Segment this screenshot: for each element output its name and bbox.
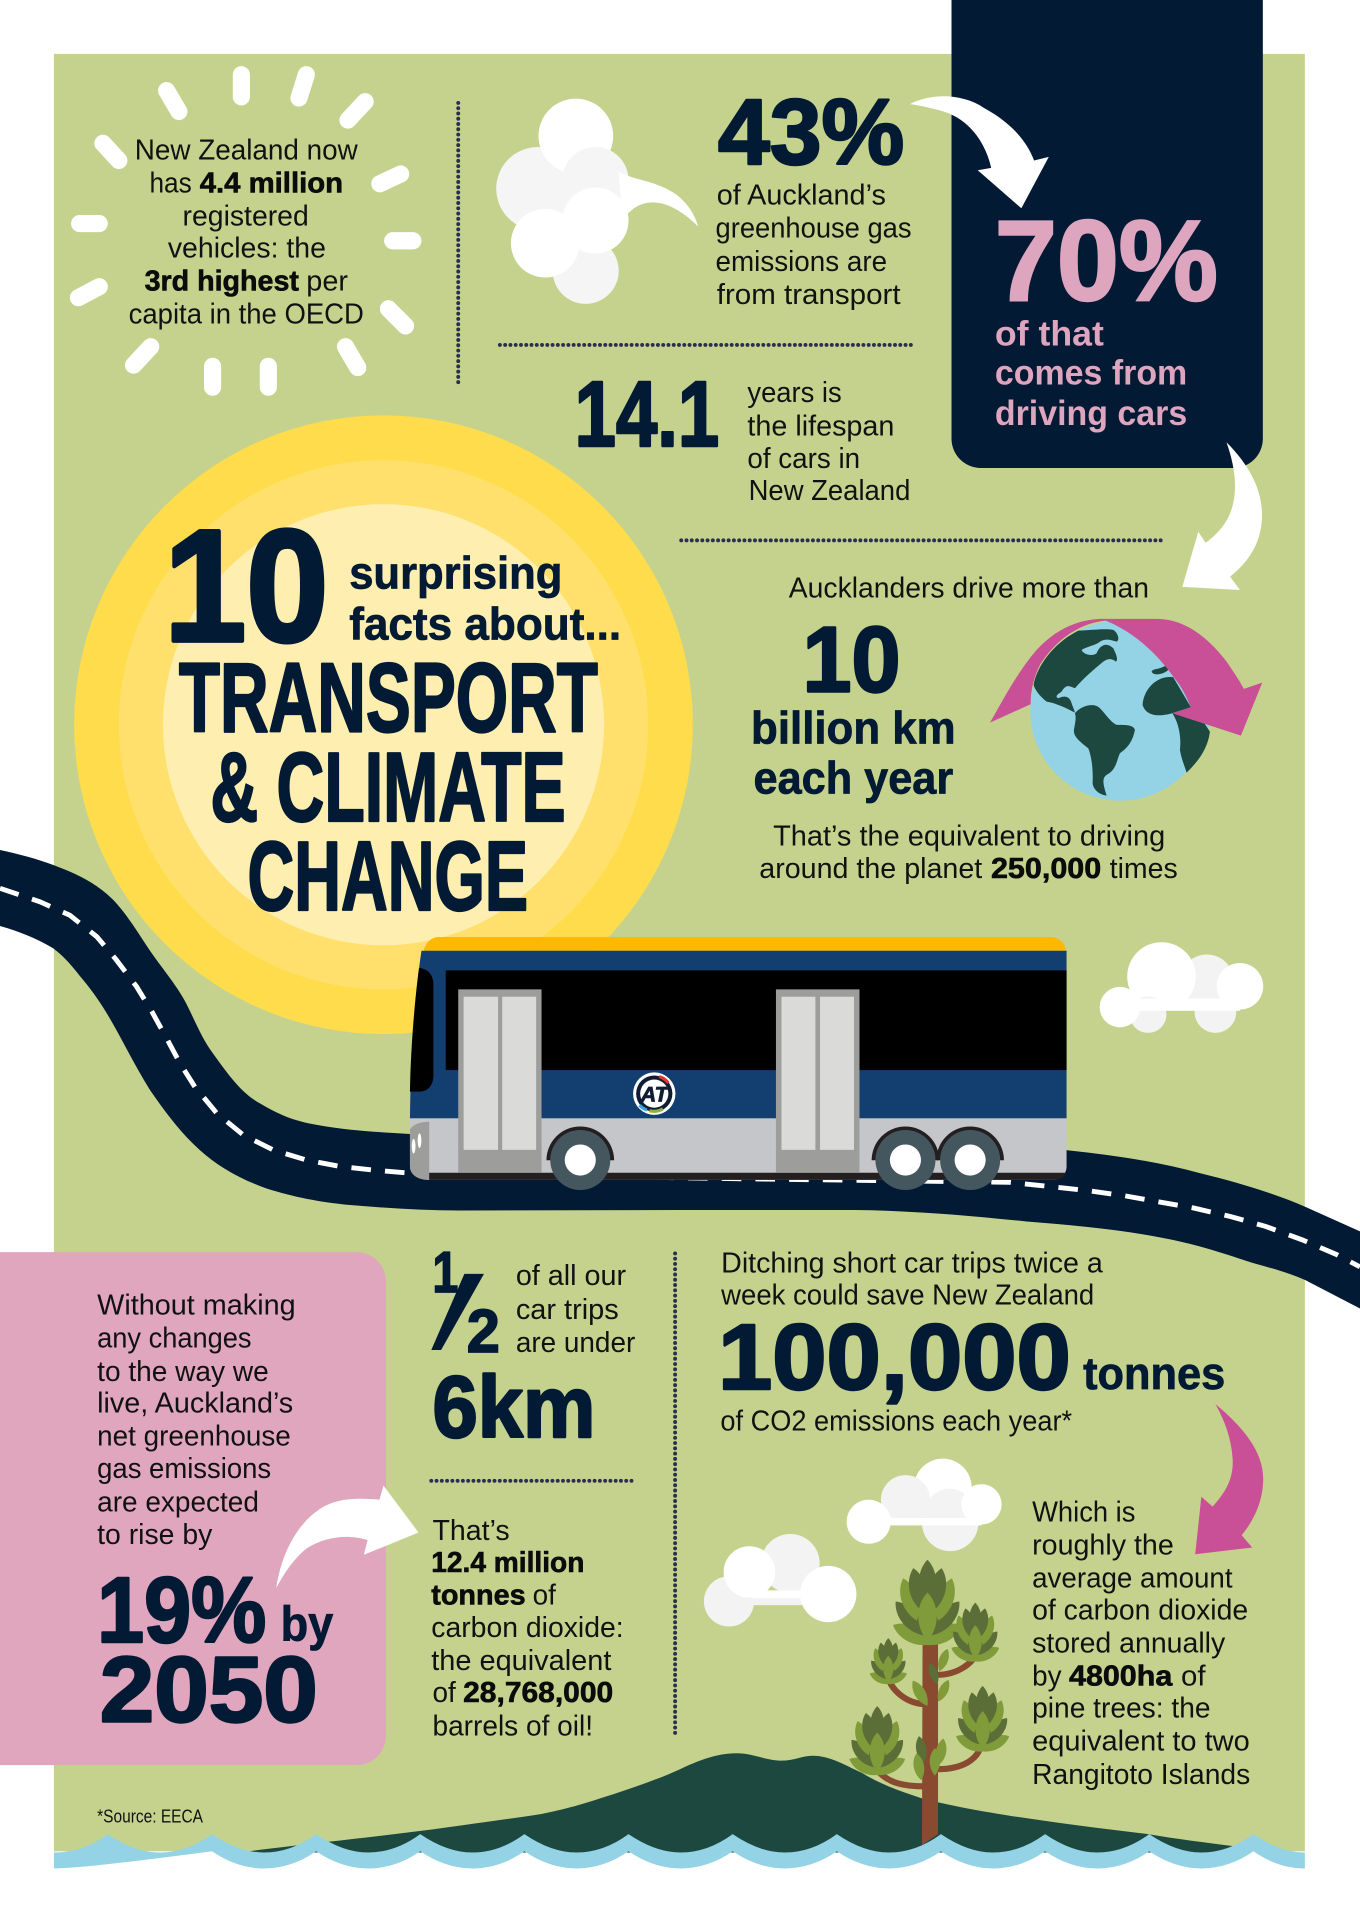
stat: 70%: 70%: [995, 198, 1218, 325]
text: pine trees comparison: Which is: [1032, 1496, 1135, 1528]
fact: half of car trips under 6km: 1: [433, 1241, 458, 1305]
hill: [239, 1753, 1250, 1853]
panel: navy 70% cars box: [952, 0, 1263, 468]
bus wheels: [546, 1126, 1004, 1190]
text: vehicle statistic: 3rd highest: [145, 265, 299, 297]
text: pine trees comparison: 4800ha: [1069, 1661, 1173, 1693]
fact: 14.1 years car lifespan: years is: [747, 377, 842, 409]
AT logo: AT: [640, 1083, 670, 1106]
fact: 10 billion km: [751, 572, 1178, 885]
fact: 14.1 years car lifespan: [575, 362, 910, 507]
text: pine trees comparison: equivalent to two: [1032, 1725, 1250, 1757]
text: vehicle statistic: capita in the OECD: [129, 298, 364, 330]
fact: 43% transport emissions: 43%: [718, 80, 904, 184]
text: 12.4 million tonnes: of: [433, 1677, 457, 1709]
sun circles: [74, 415, 693, 1034]
fact: 100,000 tonnes: 100,000: [718, 1305, 1071, 1409]
text: 12.4 million tonnes: barrels of oil!: [433, 1711, 593, 1743]
divider: dots under 6km: [431, 1479, 634, 1482]
icon: pine tree: [846, 1560, 1012, 1845]
fact: 14.1 years car lifespan: of cars in: [747, 443, 860, 475]
fact: 43% transport emissions: greenhouse gas: [716, 213, 912, 245]
fact: half of car trips under 6km: car trips: [516, 1294, 619, 1326]
bus skirt: [429, 1173, 1066, 1180]
text: vehicle statistic: New Zealand now: [135, 134, 358, 166]
text: without making changes: to the way we: [97, 1356, 269, 1388]
fact: 10 billion km: times: [1110, 853, 1178, 885]
bus rear door: [776, 989, 859, 1173]
fact: half of car trips under 6km: 2: [467, 1297, 500, 1365]
title: & CLIMATE: [210, 732, 566, 842]
fact: 100,000 tonnes: tonnes: [1083, 1348, 1225, 1399]
text: vehicle statistic: vehicles: the: [168, 232, 326, 264]
fact: half of car trips under 6km: 6km: [433, 1359, 595, 1456]
stat: 19% by 2050: 2050: [100, 1637, 318, 1741]
fact: 10 billion km: around the planet: [759, 853, 982, 885]
text: 12.4 million tonnes: of: [533, 1579, 557, 1611]
text: of that comes from driving cars: of that: [995, 314, 1104, 354]
fact: 10 billion km: 10: [803, 608, 901, 712]
text: 12.4 million tonnes: tonnes: [431, 1579, 526, 1611]
fact: 10 billion km: each year: [754, 752, 953, 803]
bus front bumper: [410, 1122, 429, 1180]
title: surprising: [349, 548, 562, 599]
icon: upper cloud: [847, 1459, 1002, 1551]
fact: 10 billion km: Aucklanders drive more than: [789, 572, 1149, 604]
fact: 10 billion km: 250,000: [991, 853, 1101, 885]
text: without making changes: Without making: [97, 1290, 296, 1322]
panel: sunburst facts about registered vehicles: [78, 75, 413, 387]
text: 12.4 million tonnes: 12.4 million: [431, 1547, 584, 1579]
text: of that comes from driving cars: driving cars: [995, 393, 1187, 433]
fact: half of car trips under 6km: are under: [516, 1327, 636, 1359]
fact: half of car trips under 6km: [431, 1241, 636, 1456]
icon: exhaust cloud: [496, 99, 698, 304]
text: of that comes from driving cars: comes from: [995, 353, 1187, 393]
title: facts about...: [349, 599, 621, 650]
text: pine trees comparison: average amount: [1032, 1563, 1233, 1595]
divider: vertical dots top: [457, 103, 460, 385]
icon: white rays: [78, 75, 413, 387]
text: without making changes: live, Auckland’s: [97, 1388, 293, 1420]
text: 12.4 million tonnes: the equivalent: [431, 1645, 611, 1677]
fact: 10 billion km: billion km: [751, 703, 956, 754]
fact: half of car trips under 6km: of all our: [516, 1260, 627, 1292]
icon: bus: [410, 937, 1067, 1190]
text: pine trees comparison: by: [1032, 1661, 1062, 1693]
text: without making changes: net greenhouse: [97, 1421, 291, 1453]
text: pine trees comparison: roughly the: [1032, 1529, 1174, 1561]
title: TRANSPORT: [179, 642, 598, 752]
fact: 14.1 years car lifespan: the lifespan: [747, 411, 894, 443]
arrow: white from navy box down: [1182, 442, 1262, 590]
text: without making changes: to rise by: [97, 1519, 213, 1551]
divider: vertical dots lower: [673, 1253, 677, 1734]
text: without making changes: any changes: [97, 1323, 252, 1355]
icon: lower cloud: [704, 1534, 856, 1626]
bus roof: [424, 937, 1066, 951]
arrow: magenta down to tree text: [1195, 1404, 1263, 1554]
text: 12.4 million tonnes: [431, 1515, 624, 1743]
text: 12.4 million tonnes: 28,768,000: [463, 1677, 613, 1709]
stat: 19% by 2050: 19%: [97, 1558, 266, 1662]
divider: horizontal dots upper: [500, 343, 912, 346]
bus lower body: [410, 1118, 1067, 1180]
stat: 19% by 2050: [97, 1558, 333, 1741]
fact: 10 billion km: That’s the equivalent to driving: [773, 820, 1165, 852]
bus front door: [458, 989, 542, 1173]
icon: cloud beside bus: [1100, 942, 1263, 1033]
fact: 100,000 tonnes: week could save New Zealand: [720, 1279, 1094, 1311]
text: pine trees comparison: of carbon dioxide: [1032, 1595, 1248, 1627]
fact: 43% transport emissions: from transport: [717, 279, 901, 311]
fact: 43% transport emissions: [716, 80, 912, 311]
stat: 19% by 2050: by: [281, 1598, 333, 1652]
hero: sun with title: [74, 415, 693, 1034]
fact: 100,000 tonnes: [718, 1248, 1225, 1438]
bus windscreen: [410, 968, 433, 1092]
water waves: [54, 1834, 1305, 1868]
fact: 43% transport emissions: of Auckland’s: [717, 180, 886, 212]
fact: 100,000 tonnes: of CO2 emissions each year*: [720, 1406, 1072, 1438]
title: 10: [164, 497, 328, 675]
fact: 43% transport emissions: emissions are: [716, 246, 887, 278]
text: without making changes: are expected: [97, 1486, 259, 1518]
text: vehicle statistic: 4.4 million: [200, 167, 343, 199]
text: of that comes from driving cars: [995, 314, 1187, 433]
text: without making changes: gas emissions: [97, 1453, 271, 1485]
arrow: white from 43% to 70%: [910, 96, 1049, 208]
fact: 14.1 years car lifespan: 14.1: [575, 362, 719, 466]
bus body blue: [410, 951, 1067, 1118]
text: pine trees comparison: stored annually: [1032, 1627, 1226, 1659]
text: pine trees comparison: pine trees: the: [1032, 1693, 1211, 1725]
divider: horizontal dots lower: [681, 539, 1162, 542]
AT logo: [633, 1072, 675, 1115]
text: vehicle statistic: has: [149, 167, 192, 199]
panel: pink 19% by 2050: [0, 1252, 386, 1765]
title: [164, 497, 621, 931]
text: pine trees comparison: of: [1181, 1661, 1207, 1693]
text: 12.4 million tonnes: That’s: [433, 1515, 510, 1547]
text: 12.4 million tonnes: carbon dioxide:: [431, 1612, 624, 1644]
fact: 14.1 years car lifespan: New Zealand: [749, 475, 910, 507]
text: pine trees comparison: [1032, 1496, 1250, 1791]
text: vehicle statistic: [129, 134, 364, 330]
road: [0, 850, 1360, 1309]
title: CHANGE: [247, 821, 528, 931]
fact: 100,000 tonnes: Ditching short car trips twice a: [721, 1248, 1103, 1280]
icon: globe with pink arrow: [990, 619, 1262, 801]
text: vehicle statistic: per: [306, 265, 348, 297]
arrow: white from pink panel: [276, 1486, 419, 1588]
text: without making changes: [97, 1290, 296, 1551]
text: vehicle statistic: registered: [183, 200, 309, 232]
bus window: [446, 970, 1067, 1070]
text: pine trees comparison: Rangitoto Islands: [1032, 1759, 1250, 1791]
text: source note: *Source: EECA: [97, 1806, 204, 1827]
